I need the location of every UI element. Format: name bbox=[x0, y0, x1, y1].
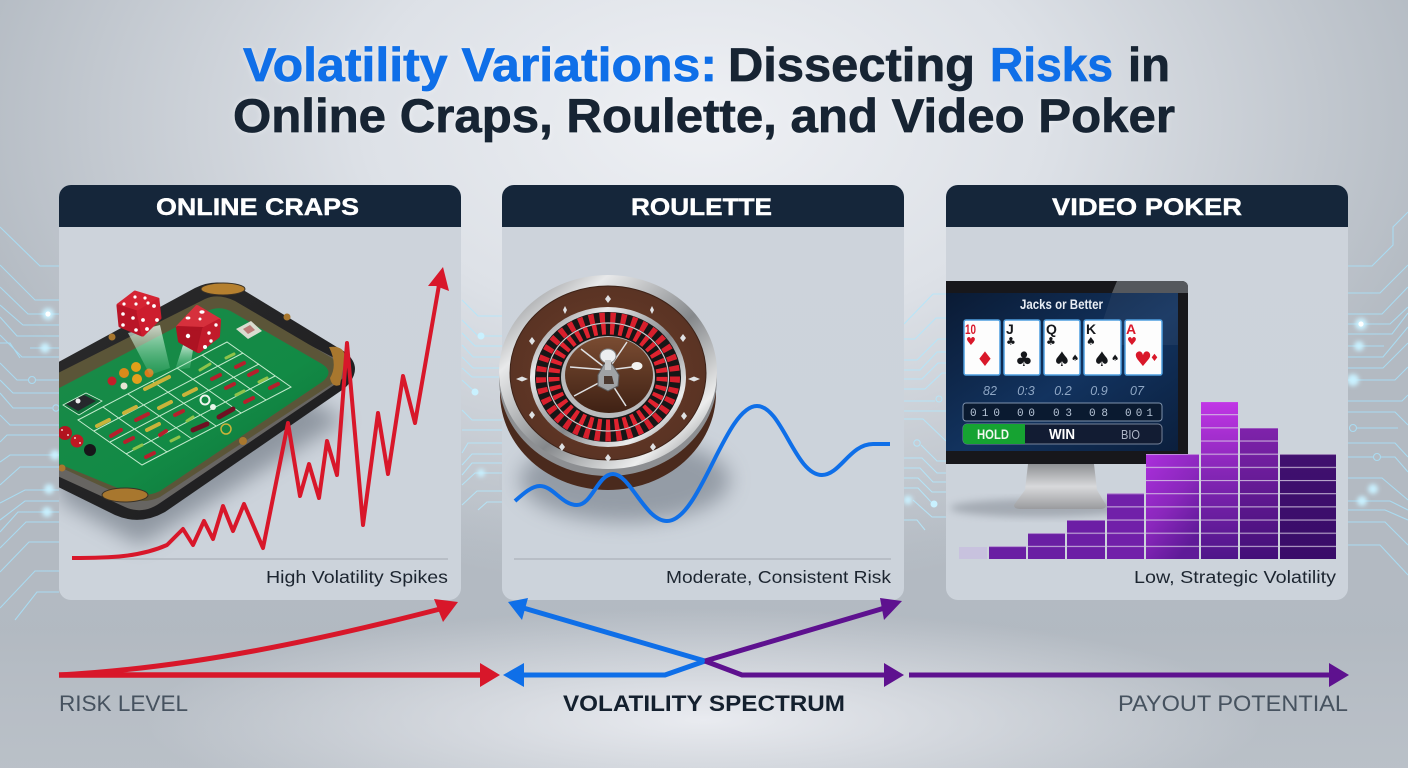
cards: ♥ bbox=[1134, 347, 1152, 371]
cards: ♠ bbox=[1086, 335, 1096, 348]
poker caption: Low, Strategic Volatility bbox=[1134, 567, 1336, 587]
cards: ♠ bbox=[1093, 347, 1111, 371]
die one bbox=[118, 292, 160, 335]
monitor bezel bbox=[940, 281, 1188, 464]
control row: HOLD bbox=[977, 426, 1009, 442]
game name: Jacks or Better bbox=[1020, 297, 1104, 312]
circuit pattern: gap between craps and roulette bbox=[462, 300, 502, 510]
panel: online craps bbox=[40, 185, 461, 600]
pay values bbox=[983, 386, 1144, 395]
credits row: 0 0 1 bbox=[1125, 408, 1153, 420]
poker panel header: VIDEO POKER bbox=[1052, 194, 1242, 221]
table chips bbox=[108, 362, 154, 390]
circuit pattern: right bbox=[1347, 212, 1408, 575]
control row: BIO bbox=[1121, 428, 1140, 442]
table pockets bbox=[58, 283, 345, 502]
pay values: 0:3 bbox=[1017, 384, 1035, 398]
wheel spindle bbox=[570, 342, 642, 406]
wheel pockets bbox=[541, 318, 675, 436]
circuit pattern: gap between roulette and video poker bbox=[904, 294, 946, 530]
roulette panel background bbox=[502, 185, 904, 600]
cards: ♥ bbox=[1127, 335, 1137, 348]
title bbox=[233, 38, 1175, 142]
cards: ♣ bbox=[1046, 335, 1056, 348]
title: Volatility Variations: bbox=[243, 38, 717, 91]
poker panel header bbox=[946, 185, 1348, 227]
cards: ♠ bbox=[1053, 347, 1071, 371]
axis label: payout potential: PAYOUT POTENTIAL bbox=[1118, 691, 1348, 716]
red volatility chart bbox=[72, 267, 449, 558]
title: Dissecting bbox=[728, 38, 975, 91]
cards: J bbox=[1006, 321, 1014, 337]
roulette baseline bbox=[514, 558, 891, 560]
panel: roulette bbox=[499, 185, 904, 600]
roulette caption: Moderate, Consistent Risk bbox=[666, 567, 891, 587]
credits row bbox=[963, 403, 1162, 421]
monitor stand bbox=[1014, 464, 1106, 509]
craps table bbox=[40, 282, 355, 545]
betting grid bbox=[78, 342, 291, 465]
cards: ♥ bbox=[966, 335, 976, 348]
panel: video poker bbox=[940, 185, 1348, 600]
die two bbox=[178, 307, 219, 351]
cards: ♣ bbox=[1015, 347, 1033, 371]
credits row: 0 0 bbox=[1017, 408, 1035, 420]
control row bbox=[963, 424, 1162, 444]
craps panel background bbox=[59, 185, 461, 600]
roulette panel header bbox=[502, 185, 904, 227]
cards: ♠ bbox=[1071, 354, 1079, 364]
pay values: 82 bbox=[983, 384, 997, 398]
craps caption: High Volatility Spikes bbox=[266, 567, 448, 587]
monitor screen bbox=[940, 293, 1178, 451]
wheel diamonds bbox=[516, 295, 700, 462]
table button and card bbox=[63, 321, 262, 415]
credits row: 0 3 bbox=[1053, 408, 1072, 420]
circuit pattern: left bbox=[0, 227, 60, 620]
cards: 10 bbox=[965, 321, 976, 337]
monitor bbox=[940, 281, 1188, 517]
credits row: 0 1 0 bbox=[970, 408, 1000, 420]
arrows: purple payout bbox=[705, 598, 1349, 687]
cards: A bbox=[1126, 321, 1136, 337]
cards: ♠ bbox=[1111, 354, 1119, 364]
cards: K bbox=[1086, 321, 1096, 337]
arrows: blue moderate bbox=[503, 598, 705, 687]
craps baseline bbox=[72, 558, 448, 560]
pay values: 0.2 bbox=[1054, 384, 1072, 398]
roulette wheel bbox=[499, 275, 730, 522]
cards bbox=[964, 320, 1162, 375]
title: Volatility Variations: bbox=[243, 38, 717, 91]
blue volatility chart bbox=[515, 406, 890, 521]
pay values: 07 bbox=[1130, 384, 1145, 398]
pay values: 0.9 bbox=[1090, 384, 1108, 398]
title: in bbox=[1128, 38, 1170, 91]
title: Risks bbox=[990, 38, 1113, 91]
credits row: 0 8 bbox=[1089, 408, 1108, 420]
craps panel header: ONLINE CRAPS bbox=[156, 194, 359, 221]
poker panel background bbox=[946, 185, 1348, 600]
axis label: volatility spectrum: VOLATILITY SPECTRUM bbox=[563, 691, 845, 716]
cards: ♦ bbox=[976, 347, 994, 371]
cards: Q bbox=[1046, 321, 1057, 337]
craps panel header bbox=[59, 185, 461, 227]
cards: ♦ bbox=[1150, 353, 1159, 364]
axis label: risk level: RISK LEVEL bbox=[59, 691, 188, 716]
grid markings bbox=[97, 354, 278, 457]
roulette panel header: ROULETTE bbox=[631, 194, 772, 221]
dice beams bbox=[128, 325, 193, 375]
control row: WIN bbox=[1049, 427, 1075, 443]
arrows: red risk bbox=[59, 599, 500, 687]
title: Online Craps, Roulette, and Video Poker bbox=[233, 89, 1175, 142]
purple bar chart bbox=[959, 402, 1336, 559]
title: Online Craps, Roulette, and Video Poker bbox=[233, 89, 1175, 142]
cards: ♣ bbox=[1006, 335, 1016, 348]
side chips bbox=[58, 426, 96, 456]
